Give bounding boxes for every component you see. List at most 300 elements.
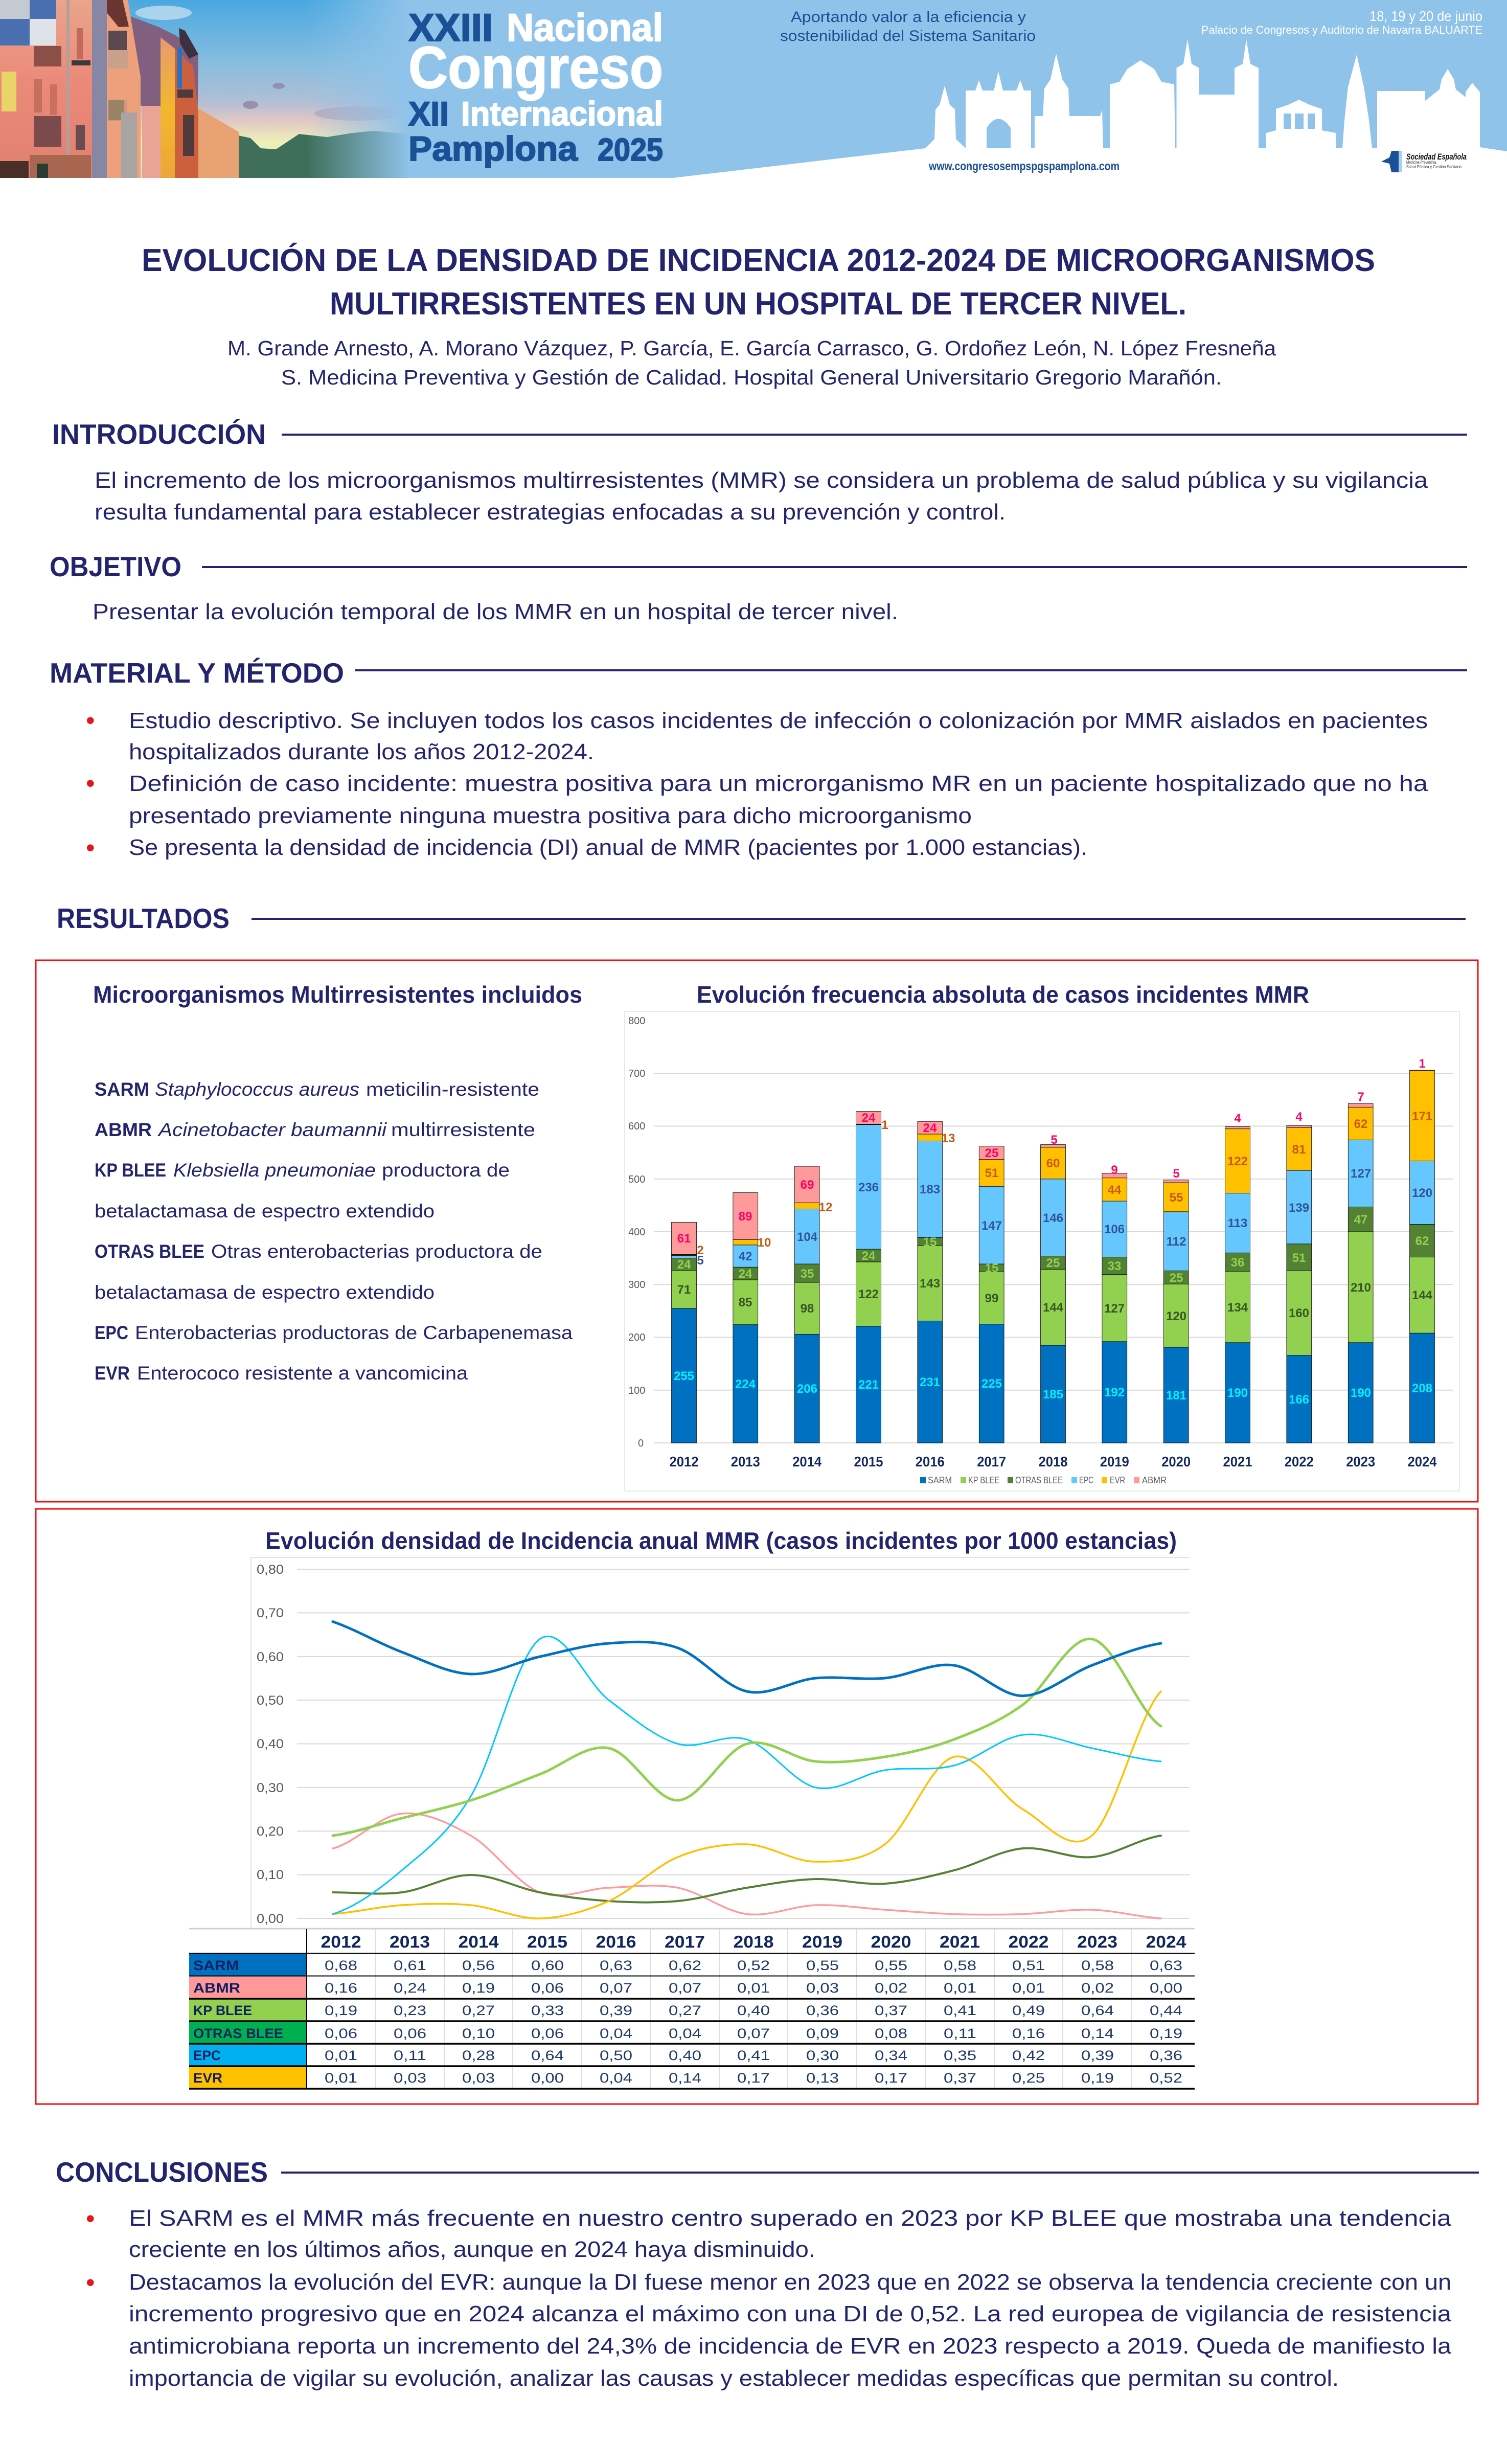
bar value labels: 47 — [1354, 1213, 1367, 1227]
bullet list: material y método: • — [86, 833, 95, 862]
table row: EVR: 0,37 — [944, 2070, 976, 2086]
congress title: XII — [408, 95, 449, 132]
table row: KP BLEE: 0,27 — [462, 2003, 495, 2018]
table row: OTRAS BLEE — [325, 2026, 1182, 2041]
table header years: 2013 — [390, 1932, 430, 1951]
y axis and gridlines: 0,60 — [257, 1650, 284, 1664]
bullet list: conclusiones: • — [86, 2204, 95, 2233]
table row: EVR: 0,01 — [325, 2070, 357, 2086]
bar value labels: 44 — [1108, 1183, 1122, 1197]
table row: KP BLEE — [325, 2003, 1182, 2018]
y axis and gridlines: 0,20 — [257, 1824, 284, 1839]
table header years: 2019 — [802, 1932, 842, 1951]
table row: KP BLEE: 0,36 — [806, 2003, 839, 2018]
table row: EPC: 0,11 — [394, 2048, 426, 2063]
bar value labels: 60 — [1046, 1157, 1060, 1170]
table row: EVR: 0,13 — [806, 2070, 839, 2086]
table row: KP BLEE: 0,19 — [325, 2003, 357, 2018]
bar value labels: 25 — [985, 1146, 998, 1160]
bullet list: conclusiones: Destacamos la evolución del EVR: aunque la DI fuese menor en 2023 que en 2022 se observa la tendencia creciente con un — [129, 2270, 1451, 2295]
y axis and gridlines: 0,40 — [257, 1737, 284, 1751]
bar value labels: 122 — [858, 1287, 879, 1301]
table header years: 2024 — [1146, 1932, 1186, 1951]
congress title: Pamplona — [408, 129, 578, 168]
bar 2014 — [794, 1166, 819, 1443]
table row: EVR: 0,17 — [737, 2070, 770, 2086]
bar value labels: 9 — [1111, 1163, 1118, 1177]
bullet list: conclusiones: creciente en los últimos años, aunque en 2024 haya disminuido. — [129, 2237, 815, 2262]
table row: EVR — [325, 2070, 1182, 2086]
bar 2021 — [1225, 1127, 1250, 1443]
table row labels: EVR — [193, 2070, 222, 2086]
table row: EVR: 0,03 — [462, 2070, 495, 2086]
bullet list: conclusiones: importancia de vigilar su evolución, analizar las causas y establecer medidas específicas que permitan su control. — [129, 2366, 1339, 2391]
congress title: Nacional — [507, 6, 663, 50]
table row: SARM: 0,63 — [600, 1958, 632, 1973]
table row: OTRAS BLEE: 0,04 — [600, 2026, 632, 2041]
table row: ABMR: 0,00 — [1150, 1980, 1182, 1996]
table row: OTRAS BLEE: 0,10 — [462, 2026, 495, 2041]
table row: EPC: 0,41 — [737, 2048, 770, 2063]
table row: EPC: 0,01 — [325, 2048, 357, 2063]
table row: OTRAS BLEE: 0,04 — [669, 2026, 701, 2041]
bar value labels: 5 — [1051, 1133, 1058, 1147]
y axis and gridlines: 300 — [628, 1279, 645, 1291]
affiliation: S. Medicina Preventiva y Gestión de Calidad. Hospital General Universitario Gregorio Marañón. — [281, 366, 1222, 389]
bar value labels: 112 — [1167, 1235, 1186, 1249]
table row: ABMR: 0,07 — [669, 1980, 701, 1996]
bar value labels: 171 — [1412, 1110, 1432, 1123]
bullet list: material y método: • — [86, 706, 95, 735]
microorganism definitions: Otras enterobacterias productora de — [211, 1241, 542, 1262]
bar value labels: 5 — [1173, 1167, 1180, 1181]
bar 2020 — [1163, 1180, 1189, 1443]
bar value labels: 81 — [1292, 1143, 1306, 1157]
y axis and gridlines: 0,00 — [257, 1912, 284, 1926]
bar value labels: 33 — [1108, 1259, 1121, 1273]
heading: objetivo: OBJETIVO — [50, 551, 181, 582]
table row: EPC: 0,36 — [1150, 2048, 1182, 2063]
table row: SARM: 0,63 — [1150, 1958, 1182, 1973]
table row: ABMR: 0,01 — [737, 1980, 770, 1996]
microorganism definitions: Acinetobacter baumannii — [157, 1119, 387, 1140]
bar value labels: 236 — [858, 1181, 879, 1194]
table row: EVR: 0,17 — [875, 2070, 907, 2086]
bar value labels: 42 — [739, 1250, 752, 1263]
bar value labels: 160 — [1289, 1306, 1309, 1320]
congress title — [408, 6, 663, 168]
congress tagline: sostenibilidad del Sistema Sanitario — [780, 28, 1036, 44]
table row: OTRAS BLEE: 0,06 — [325, 2026, 357, 2041]
table row: SARM — [325, 1958, 1182, 1973]
society logo — [1381, 151, 1467, 172]
table row: ABMR: 0,24 — [394, 1980, 426, 1996]
bullet list: conclusiones — [86, 2204, 1452, 2391]
title: MULTIRRESISTENTES EN UN HOSPITAL DE TERCER NIVEL. — [330, 286, 1186, 322]
bar 2016 — [918, 1121, 943, 1443]
bar 2024 — [1410, 1070, 1434, 1443]
bar value labels: 190 — [1351, 1386, 1371, 1400]
bar value labels: 7 — [1357, 1090, 1364, 1104]
bar value labels: 139 — [1289, 1201, 1309, 1215]
line: EPC — [333, 1636, 1161, 1914]
bar value labels: 206 — [797, 1382, 817, 1396]
y axis and gridlines — [257, 1563, 1190, 1926]
text: introducción: El incremento de los microorganismos multirresistentes (MMR) se considera un problema de salud pública y su vigilancia — [95, 468, 1428, 493]
microorganism definitions: SARM — [95, 1079, 149, 1100]
table row: KP BLEE: 0,44 — [1150, 2003, 1182, 2018]
bar value labels: 144 — [1043, 1301, 1064, 1315]
title: EVOLUCIÓN DE LA DENSIDAD DE INCIDENCIA 2012-2024 DE MICROORGANISMOS — [142, 243, 1375, 278]
congress title: XXIII — [408, 6, 493, 50]
table row: ABMR: 0,06 — [531, 1980, 564, 1996]
bar value labels: 225 — [981, 1377, 1002, 1391]
bar value labels: 208 — [1412, 1382, 1432, 1395]
bar value labels: 210 — [1351, 1281, 1371, 1295]
bar 2023 — [1348, 1103, 1373, 1443]
x axis years: 2020 — [1161, 1454, 1191, 1470]
panel: microorganisms list and absolute frequency chart — [36, 960, 1478, 1502]
bar 2019 — [1102, 1173, 1127, 1443]
table row: OTRAS BLEE: 0,19 — [1150, 2026, 1182, 2041]
table row: EPC: 0,35 — [944, 2048, 976, 2063]
legend: OTRAS BLEE — [1015, 1475, 1063, 1485]
table row: ABMR: 0,07 — [600, 1980, 632, 1996]
heading: conclusiones: CONCLUSIONES — [56, 2156, 268, 2188]
bar value labels: 69 — [801, 1178, 814, 1192]
x axis years: 2018 — [1039, 1454, 1067, 1470]
header banner — [0, 0, 1507, 178]
microorganism definitions: Staphylococcus aureus — [155, 1079, 359, 1100]
text: objetivo: Presentar la evolución temporal de los MMR en un hospital de tercer nivel. — [93, 599, 898, 624]
table row: SARM: 0,52 — [737, 1958, 770, 1973]
y axis and gridlines: 500 — [628, 1174, 645, 1185]
congress tagline: Aportando valor a la eficiencia y — [791, 9, 1026, 26]
heading: material y método: MATERIAL Y MÉTODO — [50, 657, 344, 689]
bar value labels: 113 — [1228, 1216, 1247, 1230]
bar value labels: 5 — [697, 1254, 704, 1268]
microorganism definitions: Klebsiella pneumoniae — [173, 1160, 376, 1181]
table row: OTRAS BLEE: 0,07 — [737, 2026, 770, 2041]
table header years: 2022 — [1008, 1932, 1049, 1951]
table row: OTRAS BLEE: 0,06 — [394, 2026, 426, 2041]
legend: KP BLEE — [968, 1475, 999, 1485]
x axis years: 2019 — [1100, 1454, 1129, 1470]
microorganism definitions: Enterobacterias productoras de Carbapenemasa — [135, 1322, 573, 1343]
bar value labels: 24 — [739, 1267, 752, 1281]
congress website: www.congresosempspgspamplona.com — [928, 160, 1120, 173]
table row: ABMR — [325, 1980, 1182, 1996]
legend — [920, 1475, 1167, 1485]
x axis years — [670, 1454, 1437, 1470]
bar value labels: 4 — [1295, 1110, 1303, 1124]
bullet list: material y método — [86, 706, 1428, 862]
bullet list: conclusiones: • — [86, 2268, 95, 2297]
table row: SARM: 0,62 — [669, 1958, 701, 1973]
stacked bar chart — [625, 1011, 1459, 1491]
table row: EVR: 0,04 — [600, 2070, 632, 2086]
table row labels: OTRAS BLEE — [193, 2026, 283, 2041]
table row: SARM: 0,55 — [875, 1958, 907, 1973]
society logo: Medicina Preventiva, — [1406, 160, 1437, 165]
line: SARM — [333, 1622, 1161, 1696]
x axis years: 2021 — [1223, 1454, 1252, 1470]
bar value labels: 255 — [674, 1369, 694, 1383]
x axis years: 2023 — [1346, 1454, 1375, 1470]
bar value labels: 15 — [985, 1261, 998, 1275]
microorganism definitions: EVR — [95, 1363, 130, 1384]
text: introducción: resulta fundamental para establecer estrategias enfocadas a su prevención y control. — [95, 500, 1006, 525]
microorganism definitions: productora de — [382, 1160, 510, 1181]
heading: introducción: INTRODUCCIÓN — [52, 418, 266, 450]
heading: resultados: RESULTADOS — [57, 902, 230, 934]
congress tagline — [780, 9, 1036, 44]
bar value labels: 24 — [677, 1258, 691, 1272]
table row: EVR: 0,25 — [1012, 2070, 1045, 2086]
bar value labels: 181 — [1166, 1389, 1186, 1403]
bar value labels: 1 — [881, 1118, 888, 1132]
congress date and venue — [1201, 8, 1482, 36]
bar value labels: 25 — [1170, 1271, 1183, 1285]
table row labels: KP BLEE — [193, 2003, 252, 2018]
table row: SARM: 0,61 — [394, 1958, 426, 1973]
bar value labels: 166 — [1289, 1393, 1309, 1407]
table header years: 2012 — [321, 1932, 361, 1951]
bar value labels: 35 — [801, 1267, 814, 1281]
bar value labels: 24 — [923, 1121, 937, 1135]
table row: KP BLEE: 0,49 — [1012, 2003, 1045, 2018]
congress date and venue: 18, 19 y 20 de junio — [1369, 8, 1482, 24]
table row: KP BLEE: 0,37 — [875, 2003, 907, 2018]
line: KP BLEE — [333, 1639, 1161, 1836]
bullet list: conclusiones: El SARM es el MMR más frecuente en nuestro centro superado en 2023 por KP BLEE que mostraba una tendencia — [129, 2206, 1452, 2231]
x axis years: 2013 — [731, 1454, 760, 1470]
bar value labels: 185 — [1043, 1388, 1063, 1401]
x axis years: 2022 — [1285, 1454, 1314, 1470]
bar value labels: 61 — [677, 1232, 691, 1246]
congress title: Congreso — [408, 34, 663, 101]
bar value labels: 36 — [1231, 1256, 1244, 1270]
table row: EPC: 0,42 — [1012, 2048, 1045, 2063]
bar value labels: 127 — [1351, 1167, 1371, 1181]
legend: ABMR — [1142, 1475, 1167, 1485]
table row labels — [189, 1954, 307, 2089]
microorganism definitions: betalactamasa de espectro extendido — [95, 1201, 435, 1222]
bar value labels: 192 — [1104, 1386, 1125, 1399]
y axis and gridlines: 0,30 — [257, 1781, 284, 1795]
y axis and gridlines: 100 — [628, 1385, 645, 1396]
city skyline silhouette — [673, 39, 1507, 178]
table row: KP BLEE: 0,64 — [1081, 2003, 1114, 2018]
bar 2018 — [1041, 1145, 1065, 1443]
table row: EVR: 0,03 — [394, 2070, 426, 2086]
y axis and gridlines: 600 — [628, 1121, 645, 1132]
table row: ABMR: 0,01 — [1012, 1980, 1045, 1996]
table row: EPC: 0,34 — [875, 2048, 907, 2063]
y axis and gridlines — [628, 1015, 1453, 1449]
x axis years: 2014 — [792, 1454, 822, 1470]
text: introducción — [95, 468, 1428, 525]
table header years: 2021 — [940, 1932, 980, 1951]
table row: ABMR: 0,01 — [944, 1980, 976, 1996]
bar value labels: 62 — [1415, 1234, 1429, 1248]
table row labels: SARM — [193, 1958, 239, 1973]
table row: EVR: 0,52 — [1150, 2070, 1182, 2086]
y axis and gridlines: 0,70 — [257, 1606, 284, 1620]
table row: EPC: 0,50 — [600, 2048, 632, 2063]
bar 2022 — [1287, 1126, 1312, 1443]
bar value labels: 1 — [1419, 1057, 1426, 1071]
bar value labels: 183 — [920, 1183, 940, 1196]
table row: SARM: 0,58 — [944, 1958, 976, 1973]
bar value labels: 51 — [985, 1166, 998, 1180]
bar value labels: 85 — [739, 1296, 752, 1309]
table row: ABMR: 0,16 — [325, 1980, 357, 1996]
table row: SARM: 0,56 — [462, 1958, 495, 1973]
line: OTRAS BLEE — [333, 1836, 1161, 1903]
microorganism definitions: EPC — [95, 1322, 128, 1343]
table header years: 2016 — [596, 1932, 636, 1951]
table row: EPC — [325, 2048, 1182, 2063]
bar value labels: 99 — [985, 1292, 998, 1305]
bar value labels: 89 — [739, 1210, 752, 1224]
bar value labels: 122 — [1227, 1155, 1248, 1168]
bar value labels: 13 — [942, 1132, 955, 1145]
table row: SARM: 0,58 — [1081, 1958, 1114, 1973]
legend: EPC — [1079, 1475, 1093, 1485]
table row: EPC: 0,28 — [462, 2048, 495, 2063]
bar 2017 — [979, 1146, 1004, 1443]
bar value labels: 147 — [981, 1219, 1002, 1233]
y axis and gridlines: 0,80 — [257, 1563, 284, 1577]
table row: EVR: 0,00 — [531, 2070, 564, 2086]
bar value labels: 190 — [1227, 1386, 1248, 1400]
x axis years: 2024 — [1408, 1454, 1437, 1470]
table header years: 2023 — [1077, 1932, 1117, 1951]
table header years — [321, 1932, 1186, 1951]
bullet list: conclusiones: antimicrobiana reporta un incremento del 24,3% de incidencia de EVR en 2023 respecto a 2019. Queda de manifiesto la — [129, 2334, 1452, 2359]
bar 2012 — [672, 1222, 696, 1443]
microorganism definitions — [95, 1079, 573, 1384]
bar value labels: 120 — [1166, 1309, 1186, 1323]
bar value labels: 143 — [920, 1277, 940, 1291]
table row labels: EPC — [193, 2048, 221, 2063]
table row: KP BLEE: 0,40 — [737, 2003, 770, 2018]
bar value labels: 71 — [677, 1283, 691, 1297]
line: EVR — [333, 1691, 1161, 1918]
table row: SARM: 0,55 — [806, 1958, 839, 1973]
table row: EVR: 0,19 — [1081, 2070, 1114, 2086]
table row: ABMR: 0,03 — [806, 1980, 839, 1996]
microorganism definitions: Enterococo resistente a vancomicina — [137, 1363, 468, 1384]
table row: EPC: 0,40 — [669, 2048, 701, 2063]
bar value labels: 55 — [1170, 1191, 1183, 1205]
table row: KP BLEE: 0,23 — [394, 2003, 426, 2018]
table grid — [189, 1929, 1195, 2089]
table row: OTRAS BLEE: 0,11 — [944, 2026, 976, 2041]
table row: EPC: 0,39 — [1081, 2048, 1114, 2063]
table row: SARM: 0,68 — [325, 1958, 357, 1973]
data table — [189, 1929, 1195, 2089]
microorganism definitions: betalactamasa de espectro extendido — [95, 1282, 435, 1303]
line chart — [251, 1557, 1190, 1928]
y axis and gridlines: 700 — [628, 1068, 645, 1079]
bullet list: material y método: Estudio descriptivo. Se incluyen todos los casos incidentes de infección o colonización por MMR aislados en pacientes — [129, 708, 1428, 733]
bar value labels: 221 — [858, 1378, 879, 1392]
y axis and gridlines: 0 — [638, 1438, 644, 1449]
table row: KP BLEE: 0,39 — [600, 2003, 632, 2018]
bar 2013 — [733, 1193, 758, 1443]
bar value labels: 120 — [1412, 1186, 1432, 1200]
bar value labels: 127 — [1104, 1302, 1125, 1316]
bar value labels: 106 — [1104, 1223, 1125, 1236]
bullet list: material y método: presentado previamente ninguna muestra positiva para dicho microorganismo — [129, 803, 972, 828]
table row: OTRAS BLEE: 0,09 — [806, 2026, 839, 2041]
y axis and gridlines: 800 — [628, 1015, 645, 1027]
bar value labels — [674, 1057, 1433, 1407]
table row: ABMR: 0,02 — [875, 1980, 907, 1996]
table row: OTRAS BLEE: 0,08 — [875, 2026, 907, 2041]
table header years: 2014 — [458, 1932, 499, 1951]
authors: M. Grande Arnesto, A. Morano Vázquez, P. García, E. García Carrasco, G. Ordoñez León, N. López Fresneña — [227, 336, 1276, 360]
y axis and gridlines: 0,50 — [257, 1693, 284, 1708]
bar value labels: 231 — [920, 1375, 940, 1389]
legend: SARM — [928, 1475, 952, 1485]
table row: OTRAS BLEE: 0,16 — [1012, 2026, 1045, 2041]
x axis years: 2015 — [854, 1454, 883, 1470]
bar value labels: 12 — [819, 1201, 832, 1214]
bullet list: material y método: hospitalizados durante los años 2012-2024. — [129, 739, 594, 764]
bar value labels: 134 — [1227, 1301, 1248, 1315]
microorganism definitions: meticilin-resistente — [366, 1079, 539, 1100]
bullet list: material y método: Se presenta la densidad de incidencia (DI) anual de MMR (pacientes por 1.000 estancias). — [129, 835, 1087, 860]
title — [142, 243, 1375, 322]
chart heading: absolute frequency: Evolución frecuencia absoluta de casos incidentes MMR — [697, 981, 1309, 1008]
bar value labels: 62 — [1354, 1117, 1367, 1131]
panel: incidence density evolution — [36, 1509, 1478, 2104]
y axis and gridlines: 400 — [628, 1227, 645, 1238]
table row: KP BLEE: 0,33 — [531, 2003, 564, 2018]
table row: EPC: 0,30 — [806, 2048, 839, 2063]
table row: OTRAS BLEE: 0,14 — [1081, 2026, 1114, 2041]
bullet list: conclusiones: incremento progresivo que en 2024 alcanza el máximo con una DI de 0,52. La red europea de vigilancia de resistencia — [129, 2301, 1452, 2326]
bar value labels: 224 — [735, 1377, 756, 1391]
table row: SARM: 0,60 — [531, 1958, 564, 1973]
society logo: Salud Pública y Gestión Sanitaria — [1406, 165, 1462, 169]
bar value labels: 15 — [923, 1235, 937, 1249]
table header years: 2015 — [527, 1932, 567, 1951]
bar value labels: 146 — [1043, 1211, 1063, 1225]
bar value labels: 98 — [801, 1302, 814, 1316]
bar value labels: 104 — [797, 1230, 818, 1244]
bullet list: material y método: Definición de caso incidente: muestra positiva para un microrganismo MR en un paciente hospitalizado que no ha — [129, 771, 1428, 796]
bar value labels: 2 — [697, 1244, 704, 1257]
table row: EVR: 0,14 — [669, 2070, 701, 2086]
y axis and gridlines: 200 — [628, 1332, 645, 1343]
bar value labels: 51 — [1292, 1251, 1306, 1265]
bar value labels: 24 — [862, 1111, 876, 1125]
table header years: 2017 — [665, 1932, 705, 1951]
bar value labels: 144 — [1412, 1288, 1433, 1302]
bar value labels: 25 — [1046, 1256, 1060, 1270]
bar value labels: 10 — [758, 1236, 771, 1250]
congress date and venue: Palacio de Congresos y Auditorio de Navarra BALUARTE — [1201, 24, 1482, 36]
table row: ABMR: 0,19 — [462, 1980, 495, 1996]
x axis years: 2016 — [916, 1454, 945, 1470]
line: ABMR — [333, 1814, 1161, 1918]
bar value labels: 4 — [1234, 1112, 1241, 1125]
x axis years: 2012 — [670, 1454, 698, 1470]
